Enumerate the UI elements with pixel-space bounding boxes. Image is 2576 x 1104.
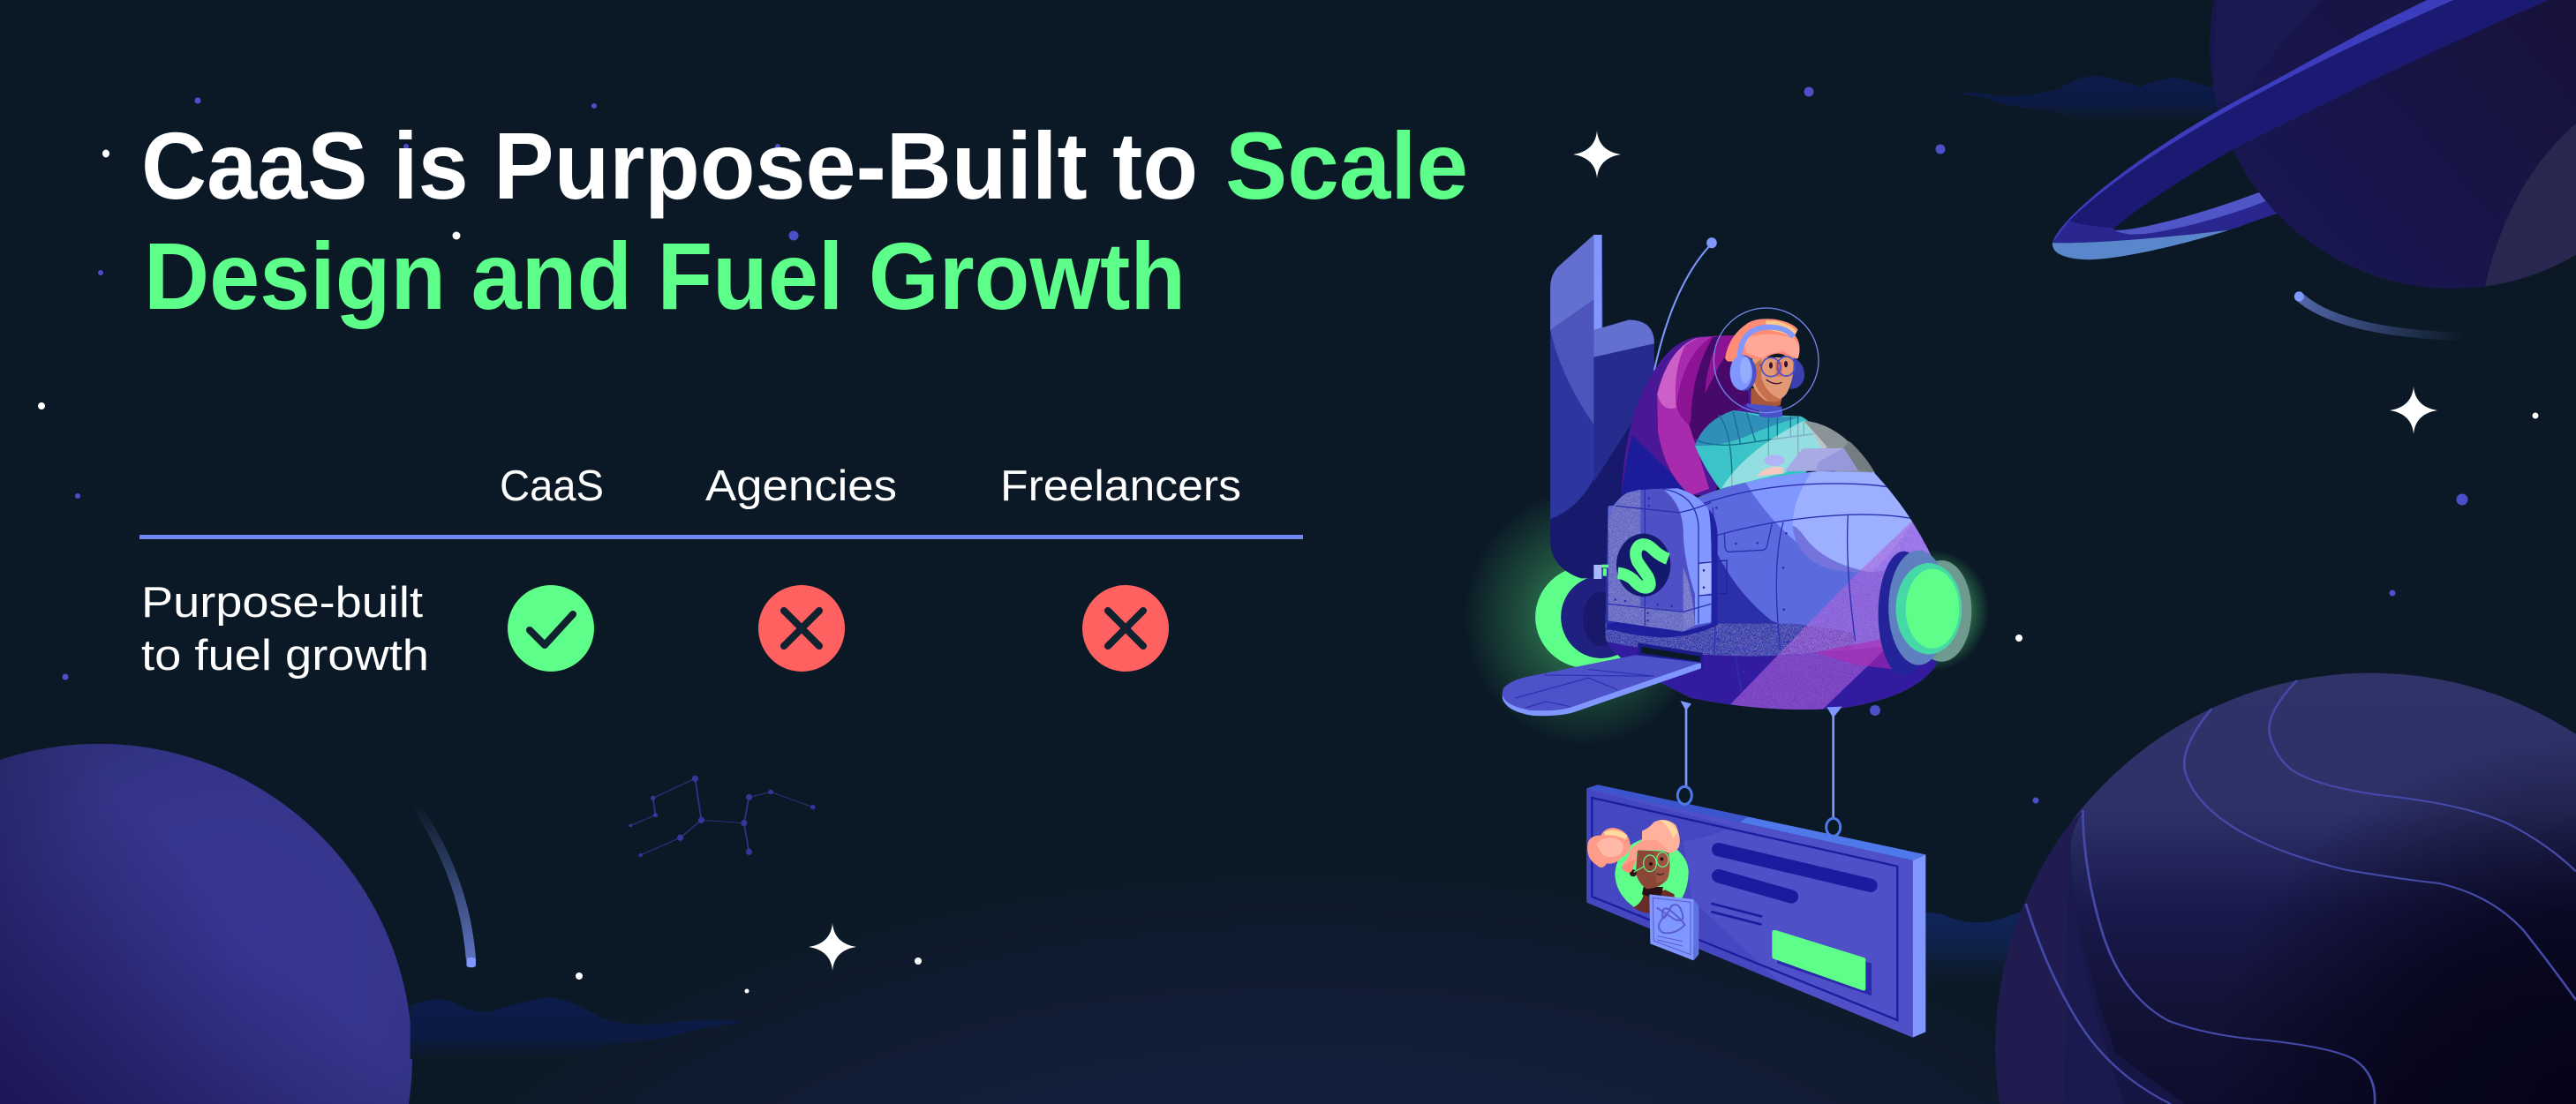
comparison table [139, 462, 1303, 680]
logo S [1618, 544, 1668, 588]
glasses [1634, 852, 1668, 872]
hull and pod [1593, 470, 1936, 715]
shooting star bottom left [415, 805, 476, 967]
icon: sparkle star right [2390, 387, 2437, 434]
ship front layers [1503, 550, 1971, 716]
logo badge [1616, 534, 1670, 597]
shooting star top right [2294, 291, 2464, 337]
antenna [1654, 237, 1717, 371]
icon: cross Freelancers [1082, 585, 1169, 672]
green circle [1615, 838, 1689, 911]
glow: left thruster [1464, 489, 1706, 746]
icon: cross Agencies [758, 585, 845, 672]
ship rear layers [1464, 235, 1989, 746]
sweater [1695, 410, 1827, 492]
cloud right [1898, 909, 2030, 988]
row label: to fuel growth [141, 632, 429, 680]
bracket [1593, 565, 1608, 579]
column heading CaaS: CaaS [500, 462, 604, 510]
planet: bottom left [0, 744, 412, 1104]
background hill [464, 856, 2149, 1104]
headphones [1740, 327, 1794, 357]
title [141, 112, 1468, 329]
glow: right thruster [1876, 550, 1989, 671]
second fin [1593, 319, 1654, 578]
face [1636, 850, 1669, 889]
boarding ramp [1503, 642, 1703, 716]
hair [1725, 319, 1800, 362]
illustration: hanging sign [1586, 701, 1925, 1038]
planet contour lines [2026, 680, 2576, 1104]
cloud bottom left [411, 997, 739, 1059]
icon: sparkle star bottom [809, 923, 856, 971]
planet body [2210, 0, 2576, 289]
row label: Purpose-built [141, 579, 423, 627]
title line 1 white: CaaS is Purpose-Built to [141, 112, 1198, 219]
collar [1746, 403, 1782, 417]
avatar and signature card [1587, 820, 1699, 960]
planet: top right with ring [2053, 0, 2576, 289]
neck and face [1751, 388, 1783, 407]
cloud top right [1958, 76, 2249, 121]
helmet [1714, 308, 1819, 413]
ring: back part [2113, 191, 2282, 236]
smile [1766, 379, 1781, 384]
column heading Agencies: Agencies [705, 462, 897, 510]
right thruster [1879, 550, 1971, 676]
laptop [1785, 448, 1858, 471]
constellation [629, 776, 816, 857]
rear fin [1550, 235, 1603, 578]
ring: front band [2053, 0, 2549, 259]
title word Scale: Scale [1225, 112, 1468, 219]
sign text bars [1712, 850, 1871, 924]
green button [1772, 930, 1872, 995]
signature card [1649, 894, 1699, 960]
sign board [1586, 785, 1925, 1038]
hanging rods [1680, 701, 1842, 818]
illustration: spaceship [1464, 235, 1989, 746]
hull [1605, 470, 1936, 715]
icon: sparkle star top [1573, 131, 1621, 178]
glasses [1759, 357, 1795, 377]
planet: bottom right [1983, 672, 2576, 1104]
canopy glass [1804, 421, 1875, 474]
side pod [1593, 488, 1727, 637]
title line 2 green: Design and Fuel Growth [144, 222, 1186, 329]
pilot [1695, 308, 1875, 492]
header rule [139, 535, 1303, 539]
background dots [38, 86, 2539, 994]
seat [1622, 335, 1757, 495]
icon: check CaaS [508, 585, 594, 672]
hand and cup [1757, 467, 1784, 476]
hair buns [1587, 820, 1680, 873]
hanging rings [1677, 786, 1841, 836]
left thruster [1535, 566, 1641, 668]
column heading Freelancers: Freelancers [1000, 462, 1241, 510]
shoulders and neck [1633, 890, 1675, 918]
